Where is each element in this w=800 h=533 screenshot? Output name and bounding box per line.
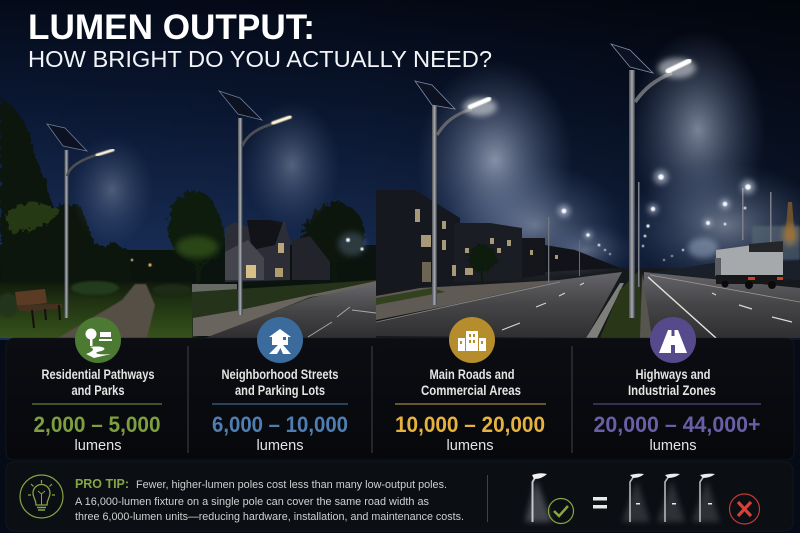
scene: highway (638, 182, 800, 338)
tier: main roads and commercial areas: lumens (446, 437, 494, 454)
icon: single high-output pole with check (525, 473, 574, 524)
tier: neighborhood streets and parking lots: lumens (256, 437, 304, 454)
tier: residential pathways and parks: and Parks (72, 383, 124, 398)
tier: highways and industrial zones: Industrial Zones (628, 383, 716, 398)
scene: main road and highway base (376, 268, 800, 338)
pro tip text: A 16,000-lumen fixture on a single pole can cover the same road width as (75, 496, 429, 508)
tier: highways and industrial zones: 20,000 – 44,000+ (594, 412, 760, 437)
night sky background (0, 0, 800, 340)
pro tip text: PRO TIP: (75, 476, 129, 491)
pro tip text (75, 476, 464, 523)
icon: three low-output poles with cross (622, 474, 760, 524)
tier: residential pathways and parks: Residential Pathways (42, 367, 154, 382)
tier: residential pathways and parks: 2,000 – 5,000 (34, 412, 160, 437)
light beams (70, 30, 800, 287)
street light 3 (415, 81, 497, 305)
pro tip text: three 6,000-lumen units—reducing hardware, installation, and maintenance costs. (75, 511, 464, 523)
title: LUMEN OUTPUT: (28, 7, 315, 47)
tier: main roads and commercial areas: 10,000 – 20,000 (395, 412, 545, 437)
icon: light bulb (20, 475, 63, 518)
tier: residential pathways and parks (32, 317, 162, 454)
scene: neighborhood street (168, 191, 376, 338)
title: HOW BRIGHT DO YOU ACTUALLY NEED? (28, 46, 492, 72)
icon: delivery truck (715, 241, 783, 289)
tier: highways and industrial zones: lumens (650, 437, 696, 454)
tier: neighborhood streets and parking lots: and Parking Lots (235, 383, 325, 398)
street light 4 (611, 44, 696, 318)
street light 1 (47, 124, 113, 318)
panel: lumen ranges (6, 317, 794, 460)
tier: main roads and commercial areas: Commercial Areas (421, 383, 521, 398)
pro tip text: Fewer, higher-lumen poles cost less than many low-output poles. (136, 479, 447, 491)
tier: highways and industrial zones (593, 317, 761, 454)
scene: main road (376, 190, 642, 338)
tier: residential pathways and parks: lumens (74, 437, 122, 454)
icon: park bench (15, 289, 62, 328)
tier: main roads and commercial areas: Main Roads and (430, 367, 514, 382)
tier: highways and industrial zones: Highways and (636, 367, 710, 382)
distant lamps (558, 170, 755, 261)
street light 2 (219, 91, 290, 315)
title (28, 7, 492, 72)
panel: pro tip (6, 462, 793, 531)
tier: neighborhood streets and parking lots: Neighborhood Streets (222, 367, 338, 382)
tier: neighborhood streets and parking lots: 6,000 – 10,000 (212, 412, 348, 437)
scene: residential park (0, 98, 192, 338)
tier: neighborhood streets and parking lots (212, 317, 348, 454)
equals sign (593, 497, 607, 508)
tier: main roads and commercial areas (395, 317, 546, 454)
